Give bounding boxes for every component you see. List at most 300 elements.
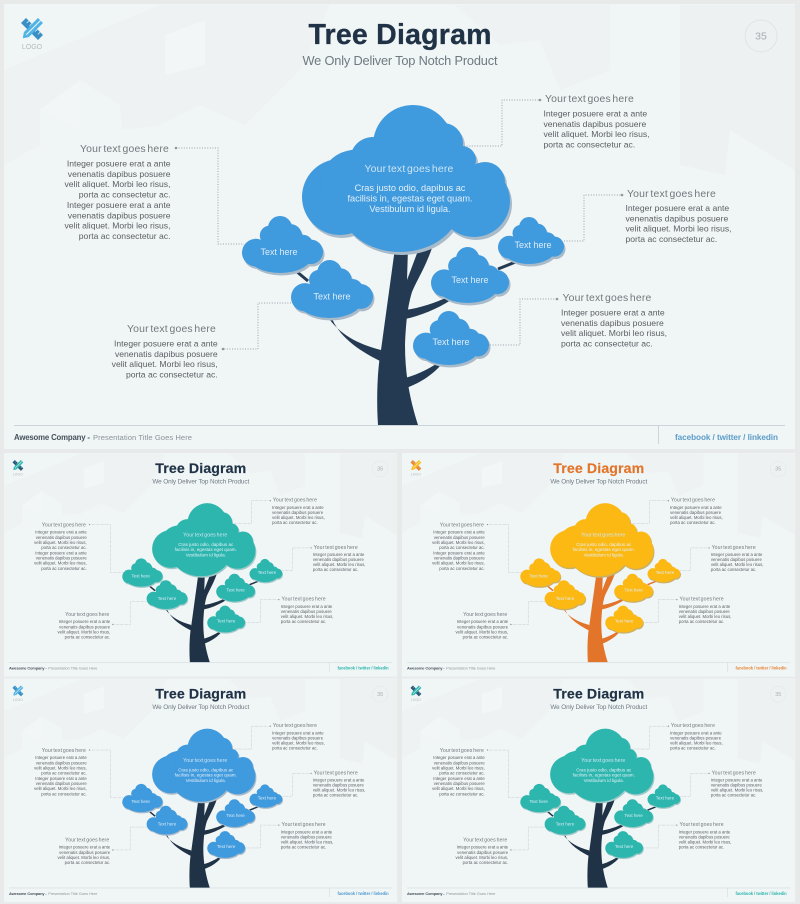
text block: middle right — [313, 770, 366, 798]
dotted connectors — [487, 500, 710, 625]
text block: top right: porta ac consectetur ac. — [272, 520, 318, 525]
footer: Awesome Company - — [9, 666, 47, 671]
main cloud — [152, 503, 256, 578]
footer: facebook / twitter / linkedin — [337, 891, 389, 896]
slide: orange tree thumbnail — [402, 453, 795, 677]
cloud: middle right — [216, 799, 256, 828]
text block: lower right: velit aliquet. Morbi leo risus, — [281, 840, 333, 845]
text block: top right — [272, 723, 325, 751]
text block: lower left — [58, 838, 111, 865]
main cloud: Vestibulum id ligula. — [584, 552, 624, 557]
cloud: lower left: Text here — [313, 292, 351, 302]
main cloud: Your text goes here — [581, 758, 625, 764]
text block: middle right: venenatis dapibus posuere — [313, 782, 364, 787]
logo — [410, 685, 421, 702]
slide: teal tree thumbnail — [4, 453, 397, 677]
cloud: upper right: Text here — [514, 240, 552, 250]
text block: upper left: Integer posuere erat a ante — [433, 755, 485, 760]
logo: LOGO — [22, 44, 43, 51]
text block: middle right: Integer posuere erat a ante — [626, 203, 729, 213]
cloud: upper right — [648, 784, 681, 809]
cloud: upper right — [648, 559, 681, 583]
text block: top right: porta ac consectetur ac. — [272, 746, 318, 751]
cloud: lower left — [147, 580, 188, 610]
cloud: upper right: Text here — [656, 570, 675, 575]
footer: Awesome Company - — [14, 433, 90, 442]
text block: upper left: Integer posuere erat a ante — [35, 776, 87, 781]
cloud: lower left — [545, 580, 586, 610]
tree trunk and branches — [149, 574, 259, 662]
text block: middle right: venenatis dapibus posuere — [313, 557, 364, 562]
page number: 35 — [377, 692, 383, 698]
cloud: upper left — [242, 216, 324, 275]
text block: upper left: porta ac consectetur ac. — [41, 771, 87, 776]
text block: lower right: Your text goes here — [282, 822, 326, 828]
title: Tree Diagram — [553, 461, 644, 477]
cloud: middle right: Text here — [624, 813, 643, 818]
cloud: upper left — [122, 558, 163, 588]
text block: middle right: Your text goes here — [314, 770, 358, 776]
subtitle: We Only Deliver Top Notch Product — [550, 704, 647, 711]
text block: lower right: velit aliquet. Morbi leo risus, — [281, 614, 333, 619]
main cloud: Cras justo odio, dapibus ac — [576, 542, 632, 547]
text block: upper left: porta ac consectetur ac. — [41, 791, 87, 796]
footer — [407, 888, 790, 897]
footer: facebook / twitter / linkedin — [675, 433, 778, 442]
text block: upper left: Your text goes here — [42, 523, 86, 529]
logo: LOGO — [411, 472, 421, 476]
text block: upper left: porta ac consectetur ac. — [41, 545, 87, 550]
text block: lower left: porta ac consectetur ac. — [65, 635, 110, 640]
cloud: middle right: Text here — [226, 813, 245, 818]
text block: middle right: porta ac consectetur ac. — [711, 567, 756, 572]
cloud: middle right: Text here — [226, 588, 245, 593]
text block: upper left: Integer posuere erat a ante — [35, 755, 87, 760]
cloud: upper right: Text here — [656, 796, 675, 801]
text block: lower left: venenatis dapibus posuere — [457, 850, 509, 855]
text block: top right: porta ac consectetur ac. — [670, 746, 716, 751]
page number — [372, 461, 388, 477]
text block: lower left: velit aliquet. Morbi leo risus, — [456, 629, 508, 634]
text block: lower left: Your text goes here — [65, 612, 109, 618]
text block: upper left: porta ac consectetur ac. — [439, 566, 485, 571]
text block: lower right: porta ac consectetur ac. — [561, 338, 653, 348]
text block: middle right: venenatis dapibus posuere — [626, 213, 728, 223]
text block: lower left — [456, 838, 509, 865]
page number — [770, 686, 786, 702]
text block: lower left: velit aliquet. Morbi leo risus, — [456, 855, 508, 860]
text block: top right: venenatis dapibus posuere — [670, 510, 722, 515]
cloud: middle right: Text here — [624, 588, 643, 593]
cloud: upper left: Text here — [529, 799, 548, 804]
text block: upper left: venenatis dapibus posuere — [36, 555, 87, 560]
main cloud: Cras justo odio, dapibus ac — [576, 767, 632, 772]
text block: middle right — [626, 189, 732, 244]
text block: top right: venenatis dapibus posuere — [670, 736, 722, 741]
cloud: upper left — [122, 784, 163, 813]
text block: top right: venenatis dapibus posuere — [272, 736, 324, 741]
text block: lower right: Integer posuere erat a ante — [679, 604, 731, 609]
text block: upper left: Your text goes here — [42, 748, 86, 754]
text block: middle right — [313, 545, 366, 572]
main cloud: Vestibulum id ligula. — [186, 552, 226, 557]
text block: upper left — [432, 748, 485, 796]
text block: lower left: Your text goes here — [127, 324, 216, 335]
text block: lower left: Integer posuere erat a ante — [457, 845, 509, 850]
text block: upper left: Your text goes here — [80, 144, 169, 155]
text block: lower left: venenatis dapibus posuere — [59, 850, 111, 855]
text block: upper left — [34, 748, 87, 796]
text block: lower left: porta ac consectetur ac. — [463, 860, 508, 865]
main cloud: Your text goes here — [364, 164, 454, 175]
text block: upper left: velit aliquet. Morbi leo risus, — [432, 540, 485, 545]
text block: top right: Integer posuere erat a ante — [670, 730, 722, 735]
cloud: upper right: Text here — [258, 796, 277, 801]
text block: upper left: Integer posuere erat a ante — [35, 530, 87, 535]
text block: lower right: velit aliquet. Morbi leo risus, — [561, 328, 667, 338]
text block: top right: venenatis dapibus posuere — [272, 510, 324, 515]
slide: turquoise tree thumbnail — [402, 678, 795, 902]
text block: top right: Your text goes here — [273, 498, 317, 504]
text block: lower right: Integer posuere erat a ante — [561, 308, 665, 318]
text block: top right: Integer posuere erat a ante — [272, 730, 324, 735]
cloud: middle right — [614, 574, 654, 603]
text block: lower left: venenatis dapibus posuere — [115, 349, 218, 359]
cloud: lower left: Text here — [158, 821, 177, 826]
main cloud: Vestibulum id ligula. — [584, 778, 624, 783]
logo — [12, 685, 23, 702]
text block: upper left: velit aliquet. Morbi leo risus, — [34, 561, 87, 566]
text block: lower right — [561, 293, 667, 348]
text block: lower right: Your text goes here — [680, 597, 724, 603]
text block: upper left: porta ac consectetur ac. — [439, 545, 485, 550]
main cloud: facilisis in, egestas eget quam. — [573, 773, 635, 778]
dotted connectors — [89, 726, 312, 851]
text block: top right — [670, 498, 723, 525]
cloud: upper right — [498, 217, 566, 266]
title: Tree Diagram — [553, 686, 644, 702]
text block: lower left: Integer posuere erat a ante — [114, 338, 218, 348]
title: Tree Diagram — [155, 686, 246, 702]
tree trunk and branches — [547, 800, 657, 888]
text block: upper left: velit aliquet. Morbi leo risus, — [34, 786, 87, 791]
page number: 35 — [775, 467, 781, 473]
text block: upper left: venenatis dapibus posuere — [36, 781, 87, 786]
text block: top right — [670, 723, 723, 751]
footer: facebook / twitter / linkedin — [735, 666, 787, 671]
text block: middle right: Integer posuere erat a ante — [313, 552, 365, 557]
text block: lower right: Your text goes here — [562, 293, 652, 304]
text block: lower right — [679, 597, 731, 624]
text block: upper left: velit aliquet. Morbi leo risus, — [34, 766, 87, 771]
logo: LOGO — [411, 698, 421, 702]
slide background — [4, 4, 795, 454]
text block: middle right — [711, 545, 764, 572]
title: Tree Diagram — [308, 19, 492, 51]
main cloud: facilisis in, egestas eget quam. — [573, 547, 635, 552]
cloud: upper left — [520, 558, 561, 588]
text block: upper left: Integer posuere erat a ante — [35, 550, 87, 555]
text block: lower left: velit aliquet. Morbi leo risus, — [112, 359, 218, 369]
text block: upper left: venenatis dapibus posuere — [36, 760, 87, 765]
text block: upper left: Integer posuere erat a ante — [433, 776, 485, 781]
page number: 35 — [755, 30, 767, 42]
text block: upper left: venenatis dapibus posuere — [68, 169, 171, 179]
cloud: upper right — [250, 784, 283, 809]
footer — [9, 662, 392, 672]
footer: facebook / twitter / linkedin — [337, 666, 389, 671]
main cloud: Your text goes here — [581, 532, 625, 538]
text block: middle right: porta ac consectetur ac. — [313, 567, 358, 572]
text block: lower right: porta ac consectetur ac. — [281, 619, 326, 624]
text block: lower left: Integer posuere erat a ante — [59, 845, 111, 850]
text block: middle right: venenatis dapibus posuere — [711, 782, 762, 787]
text block: middle right: Integer posuere erat a ante — [711, 552, 763, 557]
cloud: bottom right — [605, 606, 644, 634]
cloud: lower left: Text here — [158, 596, 177, 601]
text block: top right: velit aliquet. Morbi leo risus, — [670, 741, 723, 746]
text block: upper left: Integer posuere erat a ante — [67, 158, 171, 168]
slide: blue tree thumbnail — [4, 678, 397, 902]
text block: upper left: venenatis dapibus posuere — [434, 781, 485, 786]
text block: upper left: porta ac consectetur ac. — [79, 190, 170, 200]
text block: upper left — [64, 144, 171, 241]
text block: lower right: venenatis dapibus posuere — [679, 609, 730, 614]
main cloud: facilisis in, egestas eget quam. — [175, 547, 237, 552]
slide background — [402, 678, 795, 902]
text block: lower left: Your text goes here — [463, 612, 507, 618]
text block: lower right: porta ac consectetur ac. — [281, 845, 326, 850]
text block: lower right: velit aliquet. Morbi leo risus, — [679, 840, 731, 845]
main cloud: Vestibulum id ligula. — [369, 204, 451, 214]
footer — [407, 662, 790, 672]
text block: middle right: porta ac consectetur ac. — [313, 793, 358, 798]
cloud: upper right: Text here — [258, 570, 277, 575]
text block: lower left — [456, 612, 509, 640]
cloud: bottom right: Text here — [615, 618, 634, 623]
footer: Presentation Title Goes Here — [48, 892, 97, 896]
text block: upper left: velit aliquet. Morbi leo risus, — [64, 179, 170, 189]
text block: lower right: venenatis dapibus posuere — [281, 609, 332, 614]
cloud: upper left: Text here — [131, 799, 150, 804]
cloud: lower left — [291, 260, 374, 320]
cloud: middle right: Text here — [451, 275, 489, 285]
subtitle: We Only Deliver Top Notch Product — [302, 53, 498, 68]
text block: upper left: velit aliquet. Morbi leo risus, — [432, 561, 485, 566]
tree trunk and branches — [296, 248, 518, 425]
subtitle: We Only Deliver Top Notch Product — [152, 478, 249, 485]
text block: upper left: porta ac consectetur ac. — [439, 771, 485, 776]
text block: upper left: venenatis dapibus posuere — [434, 555, 485, 560]
footer: Awesome Company - — [407, 891, 445, 896]
text block: top right — [544, 94, 650, 149]
footer: Presentation Title Goes Here — [446, 667, 495, 671]
text block: top right: Integer posuere erat a ante — [272, 505, 324, 510]
logo: LOGO — [13, 472, 23, 476]
text block: top right: velit aliquet. Morbi leo risus, — [544, 129, 650, 139]
cloud: bottom right — [413, 311, 490, 367]
cloud: upper right — [250, 559, 283, 583]
dotted connectors — [89, 500, 312, 625]
text block: middle right: porta ac consectetur ac. — [711, 793, 756, 798]
cloud: middle right — [431, 247, 510, 306]
text block: upper left: venenatis dapibus posuere — [36, 535, 87, 540]
text block: lower left: velit aliquet. Morbi leo risus, — [58, 855, 110, 860]
text block: upper left: porta ac consectetur ac. — [41, 566, 87, 571]
text block: lower left: venenatis dapibus posuere — [457, 624, 509, 629]
text block: lower left: Integer posuere erat a ante — [59, 619, 111, 624]
text block: middle right — [711, 770, 764, 798]
title: Tree Diagram — [155, 461, 246, 477]
text block: lower right — [281, 597, 333, 624]
text block: upper left: venenatis dapibus posuere — [434, 535, 485, 540]
cloud: upper left — [520, 784, 561, 813]
text block: lower right: venenatis dapibus posuere — [679, 834, 730, 839]
text block: lower right — [281, 822, 333, 850]
main cloud: Cras justo odio, dapibus ac — [178, 767, 234, 772]
text block: lower right: Your text goes here — [282, 597, 326, 603]
slide background — [4, 453, 397, 677]
text block: middle right: Integer posuere erat a ante — [711, 777, 763, 782]
text block: middle right: venenatis dapibus posuere — [711, 557, 762, 562]
cloud: upper left: Text here — [131, 574, 150, 579]
subtitle: We Only Deliver Top Notch Product — [152, 704, 249, 711]
subtitle: We Only Deliver Top Notch Product — [550, 478, 647, 485]
text block: lower left: Your text goes here — [463, 838, 507, 844]
text block: lower right: Integer posuere erat a ante — [281, 604, 333, 609]
text block: lower left: porta ac consectetur ac. — [463, 635, 508, 640]
text block: lower right: venenatis dapibus posuere — [561, 318, 664, 328]
dotted connectors — [175, 99, 623, 350]
text block: middle right: Your text goes here — [712, 770, 756, 776]
footer: Presentation Title Goes Here — [93, 433, 192, 442]
text block: lower right: Integer posuere erat a ante — [679, 829, 731, 834]
text block: top right: Your text goes here — [545, 94, 634, 105]
text block: upper left: Integer posuere erat a ante — [433, 550, 485, 555]
text block: upper left — [432, 523, 485, 571]
page number: 35 — [377, 467, 383, 473]
text block: upper left: velit aliquet. Morbi leo risus, — [34, 540, 87, 545]
main cloud — [152, 729, 256, 803]
page number: 35 — [775, 692, 781, 698]
text block: lower left — [58, 612, 111, 640]
footer — [9, 888, 392, 897]
text block: lower right: venenatis dapibus posuere — [281, 834, 332, 839]
text block: lower right: velit aliquet. Morbi leo risus, — [679, 614, 731, 619]
text block: lower left: venenatis dapibus posuere — [59, 624, 111, 629]
tree trunk and branches — [149, 800, 259, 888]
text block: middle right: velit aliquet. Morbi leo risus, — [711, 788, 764, 793]
text block: middle right: Your text goes here — [314, 545, 358, 551]
text block: lower left: Integer posuere erat a ante — [457, 619, 509, 624]
main cloud — [550, 503, 654, 578]
text block: top right: Your text goes here — [273, 723, 317, 729]
main cloud: Your text goes here — [183, 758, 227, 764]
footer: Presentation Title Goes Here — [48, 667, 97, 671]
main cloud: Your text goes here — [183, 532, 227, 538]
text block: top right: velit aliquet. Morbi leo risus, — [272, 741, 325, 746]
text block: upper left — [34, 523, 87, 571]
text block: top right: Your text goes here — [671, 723, 715, 729]
tree trunk and branches — [547, 574, 657, 662]
main cloud: facilisis in, egestas eget quam. — [347, 194, 473, 204]
cloud: bottom right: Text here — [432, 337, 470, 347]
main cloud — [550, 729, 654, 803]
page number — [372, 686, 388, 702]
logo — [20, 18, 43, 51]
cloud: upper left: Text here — [260, 247, 298, 257]
main cloud: Vestibulum id ligula. — [186, 778, 226, 783]
text block: top right — [272, 498, 325, 525]
slide background — [402, 453, 795, 677]
text block: upper left: porta ac consectetur ac. — [439, 791, 485, 796]
page number — [770, 461, 786, 477]
text block: upper left: porta ac consectetur ac. — [79, 231, 170, 241]
cloud: lower left — [147, 806, 188, 836]
text block: lower left: porta ac consectetur ac. — [65, 860, 110, 865]
cloud: bottom right — [605, 831, 644, 859]
cloud: lower left — [545, 806, 586, 836]
cloud: bottom right — [207, 831, 246, 859]
text block: top right: Integer posuere erat a ante — [544, 108, 647, 118]
text block: top right: porta ac consectetur ac. — [544, 139, 635, 149]
dotted connectors — [487, 726, 710, 851]
text block: upper left: Integer posuere erat a ante — [433, 530, 485, 535]
cloud: bottom right: Text here — [217, 844, 236, 849]
text block: lower left: velit aliquet. Morbi leo risus, — [58, 629, 110, 634]
logo: LOGO — [13, 698, 23, 702]
footer: Awesome Company - — [9, 891, 47, 896]
text block: upper left: velit aliquet. Morbi leo risus, — [432, 786, 485, 791]
cloud: lower left: Text here — [556, 821, 575, 826]
text block: lower right: porta ac consectetur ac. — [679, 619, 724, 624]
slide background — [4, 678, 397, 902]
cloud: middle right — [216, 574, 256, 603]
text block: middle right: velit aliquet. Morbi leo risus, — [711, 562, 764, 567]
text block: upper left: velit aliquet. Morbi leo risus, — [432, 766, 485, 771]
cloud: upper left: Text here — [529, 574, 548, 579]
text block: middle right: porta ac consectetur ac. — [626, 234, 717, 244]
text block: lower right — [679, 822, 731, 850]
cloud: middle right — [614, 799, 654, 828]
main cloud: Cras justo odio, dapibus ac — [178, 542, 234, 547]
logo — [12, 460, 23, 476]
footer — [14, 425, 785, 444]
text block: top right: Integer posuere erat a ante — [670, 505, 722, 510]
text block: lower left: Your text goes here — [65, 838, 109, 844]
footer: Awesome Company - — [407, 666, 445, 671]
text block: top right: porta ac consectetur ac. — [670, 520, 716, 525]
page number — [745, 20, 777, 52]
text block: lower right: Integer posuere erat a ante — [281, 829, 333, 834]
text block: middle right: Integer posuere erat a ante — [313, 777, 365, 782]
logo — [410, 460, 421, 476]
cloud: bottom right: Text here — [615, 844, 634, 849]
cloud: lower left: Text here — [556, 596, 575, 601]
text block: upper left: venenatis dapibus posuere — [434, 760, 485, 765]
text block: top right: velit aliquet. Morbi leo risus, — [272, 515, 325, 520]
text block: upper left: Integer posuere erat a ante — [67, 200, 171, 210]
main cloud: Cras justo odio, dapibus ac — [355, 183, 466, 193]
text block: middle right: velit aliquet. Morbi leo risus, — [626, 224, 732, 234]
slide: main blue tree diagram — [4, 4, 795, 454]
text block: middle right: velit aliquet. Morbi leo risus, — [313, 788, 366, 793]
text block: lower right: porta ac consectetur ac. — [679, 845, 724, 850]
text block: middle right: Your text goes here — [627, 189, 716, 200]
text block: top right: venenatis dapibus posuere — [544, 119, 646, 129]
cloud: bottom right: Text here — [217, 618, 236, 623]
footer: Presentation Title Goes Here — [446, 892, 495, 896]
